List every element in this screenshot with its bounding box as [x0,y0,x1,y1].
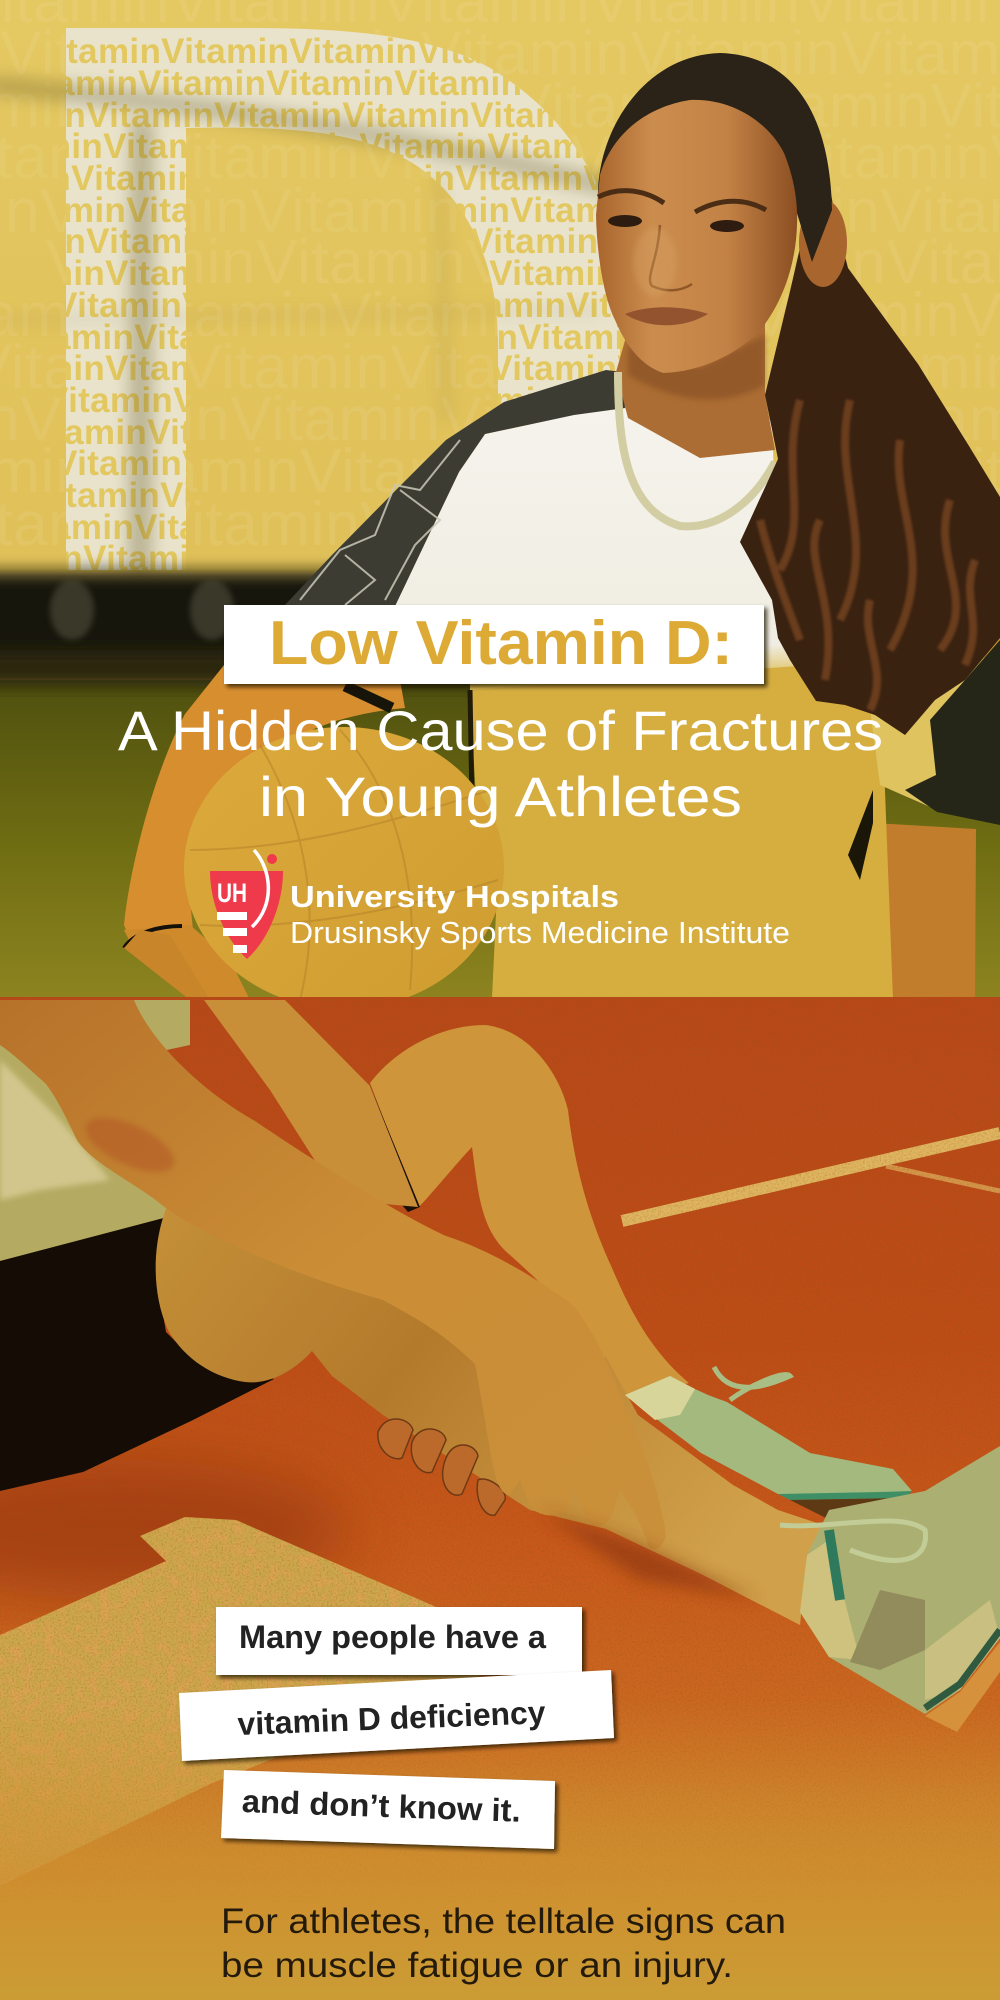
title box: Low Vitamin D: [269,609,733,678]
right sleeve [870,658,984,807]
fingers [378,1419,505,1515]
facial features [598,191,766,325]
hair highlights [760,400,975,710]
hand fingers on ball [124,930,194,997]
ball [184,727,504,1009]
callout box 3: and don’t know it. [241,1783,521,1829]
callout box 2 [179,1670,614,1761]
logo text: University Hospitals: University Hospitals [290,879,619,914]
holding forearm and hand [0,1000,666,1549]
panel: athlete photo [0,0,1000,1009]
bottom gold fade [0,1700,1000,2000]
track shade at left [0,1460,350,1600]
shorts [0,1215,274,1491]
track grain [0,997,1000,1897]
background pattern: large ghost Vitamin text [0,0,1000,559]
subtitle line 2: in Young Athletes [259,765,742,828]
running track [0,997,1000,2000]
hair on head [598,53,832,262]
extended leg [156,1195,835,1625]
long hair [740,147,1000,735]
left arm [124,665,405,930]
ball seams [190,730,498,1000]
photo background: yellow field [0,0,1000,600]
shirt gold lower [470,660,893,1000]
torso left seam [470,690,472,805]
second arm [204,1000,418,1207]
icon: UH shield logo [210,850,283,959]
grass band soft transition [0,650,540,686]
large letter D filled with Vitamin text [66,28,620,570]
grass [0,680,1000,1000]
sleeve pattern [300,440,460,605]
athlete figure [124,53,1000,1009]
back shoe [625,1367,912,1520]
collar [618,372,775,526]
track shadow under leg [540,1510,760,1600]
shirt dark side stripe [848,790,873,880]
shirt [0,1000,250,1261]
left sleeve dark panel [284,370,625,606]
panel: injured runner photo [0,997,1000,2000]
closing text line 1: For athletes, the telltale signs can [221,1902,786,1941]
track lane lines [622,1133,1000,1221]
callout box 1: Many people have a [239,1619,546,1655]
face [596,100,797,373]
hand on ball [124,925,250,1000]
forearm scrape [78,1107,182,1183]
callout box 3 [221,1770,555,1849]
bracelet [124,926,182,948]
front shoe [780,1446,1000,1732]
closing text line 2: be muscle fatigue or an injury. [221,1946,733,1985]
neck shadow [628,335,765,399]
right sleeve dark panel [905,640,1000,825]
neck [616,320,775,458]
blurred goal posts and net [0,85,620,570]
bent leg [370,1025,689,1400]
subtitle line 1: A Hidden Cause of Fractures [118,699,883,762]
ear [799,199,847,287]
strap at elbow [345,686,392,708]
torso shirt [396,408,794,997]
callout box 2: vitamin D deficiency [237,1694,546,1742]
shirt light area [0,1060,110,1200]
start mark on track [0,1500,540,1900]
black knee band [325,1086,420,1212]
callout box 1 [216,1607,582,1675]
logo text: Drusinsky Sports Medicine Institute: Drusinsky Sports Medicine Institute [290,915,790,950]
stadium band [0,558,415,662]
icon: UH shield logo: UH [217,878,247,908]
right arm [886,824,976,997]
